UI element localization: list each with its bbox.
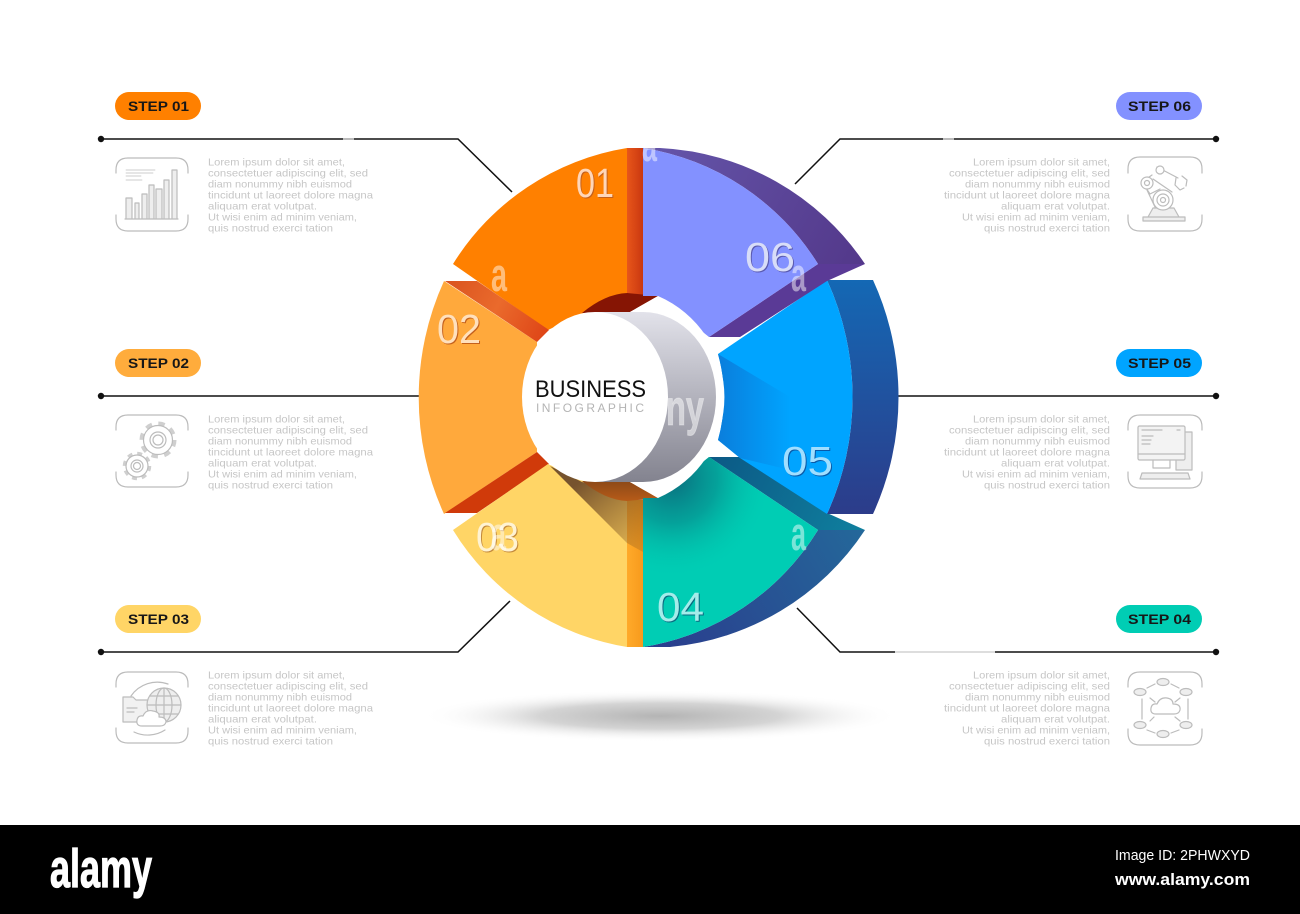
segment 05 [718,280,899,514]
pill: step 04: STEP 04 [1128,612,1192,627]
text block: step 04: quis nostrud exerci tation [984,736,1110,748]
floor shadow [420,690,900,742]
footer band: Image ID: 2PHWXYD [1115,847,1250,864]
icon: gears [116,415,188,487]
text block: step 06: aliquam erat volutpat. [1001,200,1110,212]
text block: step 04: Lorem ipsum dolor sit amet, [973,670,1110,682]
numbers: 06 [745,234,795,280]
watermark letters: a [791,248,806,301]
footer band [0,825,1300,914]
watermark letters [491,118,806,560]
watermark letters: a [491,248,508,301]
text block: step 05: quis nostrud exerci tation [984,480,1110,492]
text block: step 01: Ut wisi enim ad minim veniam, [208,212,357,224]
numbers: 03 [476,514,519,560]
pill: step 06 [1116,92,1202,120]
text block: step 03: quis nostrud exerci tation [208,736,333,748]
text block: step 04 [944,670,1110,748]
connector: step 04 [797,608,1219,655]
numbers: 04 [657,584,704,630]
text block: step 05 [944,414,1110,492]
text block: step 02: quis nostrud exerci tation [208,480,333,492]
icon: computer [1128,415,1202,488]
text block: step 03: aliquam erat volutpat. [208,714,317,726]
text block: step 04: Ut wisi enim ad minim veniam, [962,724,1110,736]
text block: step 05: diam nonummy nibh euismod [965,436,1110,448]
text block: step 04: aliquam erat volutpat. [1001,714,1110,726]
center hub: BUSINESS [535,376,646,403]
text block: step 06: diam nonummy nibh euismod [965,178,1110,190]
text block: step 04: tincidunt ut laoreet dolore magna [944,702,1110,714]
text block: step 03: consectetuer adipiscing elit, sed [208,680,368,692]
segment 02 [419,281,549,514]
icon: bar chart [116,158,188,231]
text block: step 01 [208,156,373,234]
text block: step 05: aliquam erat volutpat. [1001,458,1110,470]
numbers: 05 [782,438,833,484]
text block: step 01: consectetuer adipiscing elit, sed [208,168,368,180]
footer band: alamy [50,839,152,899]
text block: step 01: tincidunt ut laoreet dolore magna [208,190,373,202]
text block: step 02: consectetuer adipiscing elit, sed [208,424,368,436]
segment 01 [453,148,658,330]
text block: step 04: consectetuer adipiscing elit, sed [949,680,1110,692]
text block: step 02: tincidunt ut laoreet dolore magna [208,446,373,458]
pill: step 03 [115,605,201,633]
icon: cloud network [1128,672,1202,745]
center hub: INFOGRAPHIC [536,401,644,415]
text block: step 01: Lorem ipsum dolor sit amet, [208,156,345,168]
center hub [522,296,724,498]
text block: step 01: diam nonummy nibh euismod [208,178,352,190]
text block: step 03: diam nonummy nibh euismod [208,692,352,704]
pill: step 04 [1116,605,1202,633]
text block: step 03: Ut wisi enim ad minim veniam, [208,724,357,736]
text block: step 05: Lorem ipsum dolor sit amet, [973,414,1110,426]
text block: step 02: Lorem ipsum dolor sit amet, [208,414,345,426]
pill: step 05: STEP 05 [1128,356,1192,371]
text block: step 04: diam nonummy nibh euismod [965,692,1110,704]
text block: step 02: Ut wisi enim ad minim veniam, [208,468,357,480]
connector: step 03 [98,601,510,655]
text block: step 06: consectetuer adipiscing elit, sed [949,168,1110,180]
pill: step 03: STEP 03 [128,612,190,627]
numbers [437,160,833,630]
pill: step 05 [1116,349,1202,377]
segment 04 [643,457,865,647]
icon: robot arm [1128,157,1202,231]
text block: step 02: diam nonummy nibh euismod [208,436,352,448]
pill: step 06: STEP 06 [1128,99,1192,114]
connector: step 06 [795,136,1219,184]
segment 03 [453,464,658,647]
text block: step 06: quis nostrud exerci tation [984,222,1110,234]
center hub: ny [666,380,704,436]
segment 06 [643,148,865,337]
text block: step 01: quis nostrud exerci tation [208,222,333,234]
text block: step 05: Ut wisi enim ad minim veniam, [962,468,1110,480]
connector: step 01 [98,136,512,192]
text block: step 06: tincidunt ut laoreet dolore magna [944,190,1110,202]
text block: step 02 [208,414,373,492]
text block: step 06: Lorem ipsum dolor sit amet, [973,156,1110,168]
watermark letters: a [642,118,657,171]
text block: step 01: aliquam erat volutpat. [208,200,317,212]
text block: step 05: consectetuer adipiscing elit, sed [949,424,1110,436]
footer band: www.alamy.com [1114,870,1250,889]
text block: step 05: tincidunt ut laoreet dolore magna [944,446,1110,458]
icon: folder globe cloud [116,672,188,743]
watermark letters: a [491,507,506,560]
pill: step 01: STEP 01 [128,99,190,114]
text block: step 06 [944,156,1110,234]
text block: step 03 [208,670,373,748]
text block: step 06: Ut wisi enim ad minim veniam, [962,212,1110,224]
pill: step 02 [115,349,201,377]
connector: step 02 [98,393,420,399]
text block: step 02: aliquam erat volutpat. [208,458,317,470]
pill: step 01 [115,92,201,120]
text block: step 03: Lorem ipsum dolor sit amet, [208,670,345,682]
connector: step 05 [897,393,1219,399]
numbers: 01 [576,160,614,206]
watermark letters: a [791,507,806,560]
pill: step 02: STEP 02 [128,356,189,371]
text block: step 03: tincidunt ut laoreet dolore magna [208,702,373,714]
numbers: 02 [437,306,481,352]
